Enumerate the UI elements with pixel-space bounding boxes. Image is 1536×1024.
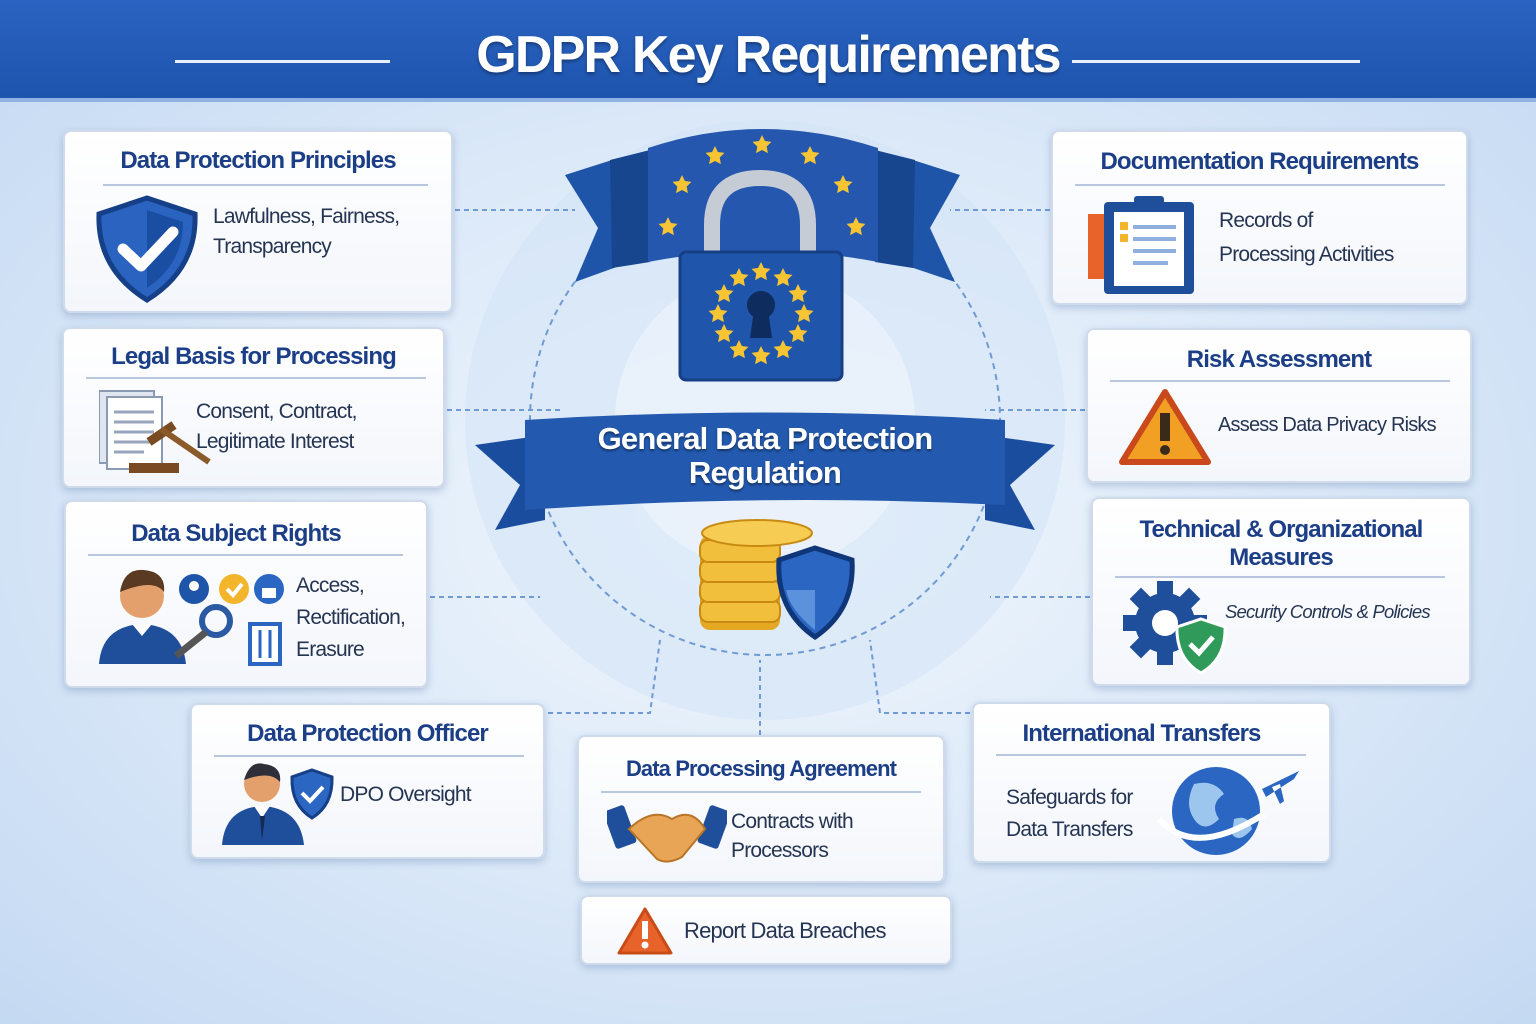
panel: International Transfers: Safeguards for xyxy=(1006,786,1133,809)
icon: gear with shield xyxy=(1123,581,1226,674)
panel: Data Protection Officer xyxy=(190,703,545,859)
icon: shield check xyxy=(96,195,198,303)
icon: globe and plane xyxy=(1158,767,1299,855)
icon: DPO person with shield xyxy=(222,763,334,845)
panel: Legal Basis for Processing: Consent, Contract, xyxy=(196,400,357,423)
panel: Data Processing Agreement: Processors xyxy=(731,839,828,862)
panel: Data Protection Principles: Transparency xyxy=(213,235,331,258)
center banner: General Data Protection xyxy=(598,421,932,456)
panel: Documentation Requirements: Processing Activities xyxy=(1219,243,1394,266)
center banner: Regulation xyxy=(689,455,841,490)
panel: Data Subject Rights xyxy=(64,500,428,688)
panel: Risk Assessment xyxy=(1086,328,1472,483)
panel: Data Protection Principles xyxy=(63,130,453,313)
panel: Data Subject Rights: Erasure xyxy=(296,638,364,661)
panel: Data Processing Agreement: Contracts with xyxy=(731,810,853,833)
icon: warning triangle xyxy=(1119,389,1211,465)
panel: Data Protection Principles: Data Protection Principles xyxy=(120,147,396,174)
panel: Documentation Requirements: Records of xyxy=(1219,209,1313,232)
panel: International Transfers xyxy=(972,702,1331,863)
panel: International Transfers: Data Transfers xyxy=(1006,818,1133,841)
panel: Documentation Requirements: Documentation Requirements xyxy=(1100,148,1418,175)
header xyxy=(0,0,1536,102)
panel: Technical & Organizational Measures: Security Controls & Policies xyxy=(1225,601,1430,622)
top ribbon xyxy=(565,129,960,282)
panel: Legal Basis for Processing xyxy=(62,327,445,488)
icon: handshake xyxy=(607,805,727,863)
icon: clipboard documents xyxy=(1088,196,1194,294)
panel: Data Protection Officer: DPO Oversight xyxy=(340,783,471,806)
panel: Technical & Organizational Measures: Technical & Organizational xyxy=(1140,516,1422,543)
icon: person, magnifier, badges xyxy=(99,570,284,666)
icon: documents and gavel xyxy=(99,390,211,473)
icon: warning xyxy=(618,907,673,954)
panel: Data Protection Principles: Lawfulness, Fairness, xyxy=(213,205,399,228)
panel: Risk Assessment: Assess Data Privacy Risks xyxy=(1218,414,1436,436)
panel: Report Data Breaches xyxy=(580,895,952,965)
coins and shield xyxy=(700,520,852,637)
panel: Legal Basis for Processing: Legal Basis for Processing xyxy=(111,343,396,370)
panel: Data Subject Rights: Access, xyxy=(296,574,364,597)
panel: Report Data Breaches: Report Data Breaches xyxy=(684,918,886,943)
panel: Data Processing Agreement xyxy=(577,735,945,883)
center banner xyxy=(475,412,1055,530)
panel: Legal Basis for Processing: Legitimate Interest xyxy=(196,430,354,453)
header: GDPR Key Requirements xyxy=(476,26,1060,84)
panel: Data Processing Agreement: Data Processing Agreement xyxy=(626,756,896,781)
panel: Documentation Requirements xyxy=(1051,130,1468,305)
panel: Technical & Organizational Measures: Measures xyxy=(1229,544,1333,571)
panel: Risk Assessment: Risk Assessment xyxy=(1187,346,1371,373)
panel: Data Protection Officer: Data Protection Officer xyxy=(247,720,488,747)
padlock xyxy=(680,178,842,380)
panel: Data Subject Rights: Data Subject Rights xyxy=(131,520,341,547)
center emblem xyxy=(565,129,960,640)
panel: Technical & Organizational Measures xyxy=(1091,497,1471,686)
panel: International Transfers: International Transfers xyxy=(1022,720,1261,747)
panel: Data Subject Rights: Rectification, xyxy=(296,606,405,629)
